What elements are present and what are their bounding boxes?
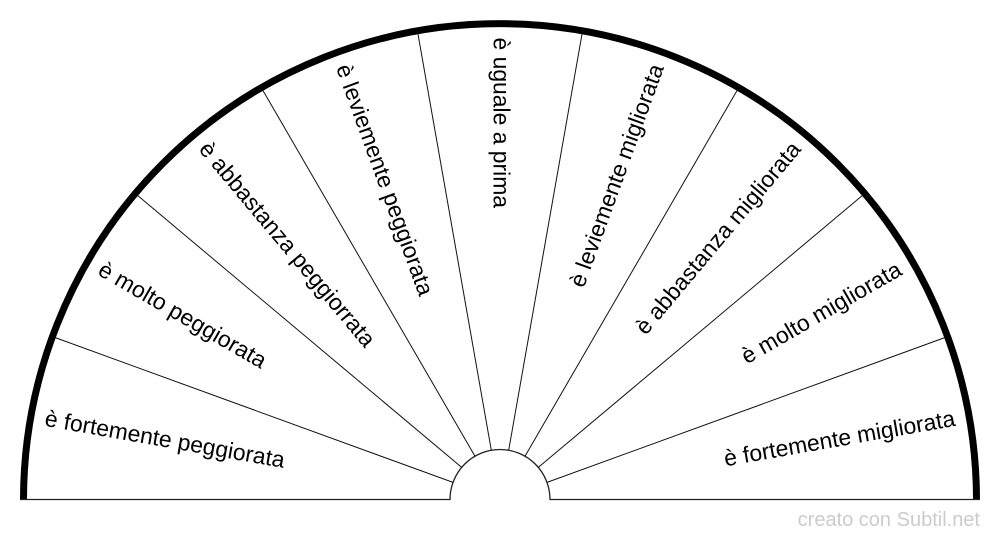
baseline and inner arc (20, 450, 980, 500)
credit text: creato con Subtil.net (798, 509, 980, 531)
label: è leviemente migliorata: è leviemente migliorata (564, 60, 669, 290)
sector labels (43, 38, 957, 473)
label: è uguale a prima: è uguale a prima (488, 38, 514, 208)
label: è fortemente peggiorata: è fortemente peggiorata (43, 405, 287, 473)
label: è leviemente peggiorata: è leviemente peggiorata (331, 60, 439, 299)
sector divider spokes (55, 31, 945, 482)
label: è abbastanza peggiorrata: è abbastanza peggiorrata (194, 136, 381, 352)
label: è fortemente migliorata: è fortemente migliorata (722, 405, 957, 471)
label: è abbastanza migliorata: è abbastanza migliorata (630, 136, 806, 339)
label: è molto migliorata: è molto migliorata (736, 256, 906, 369)
label: è molto peggiorata: è molto peggiorata (94, 256, 272, 373)
